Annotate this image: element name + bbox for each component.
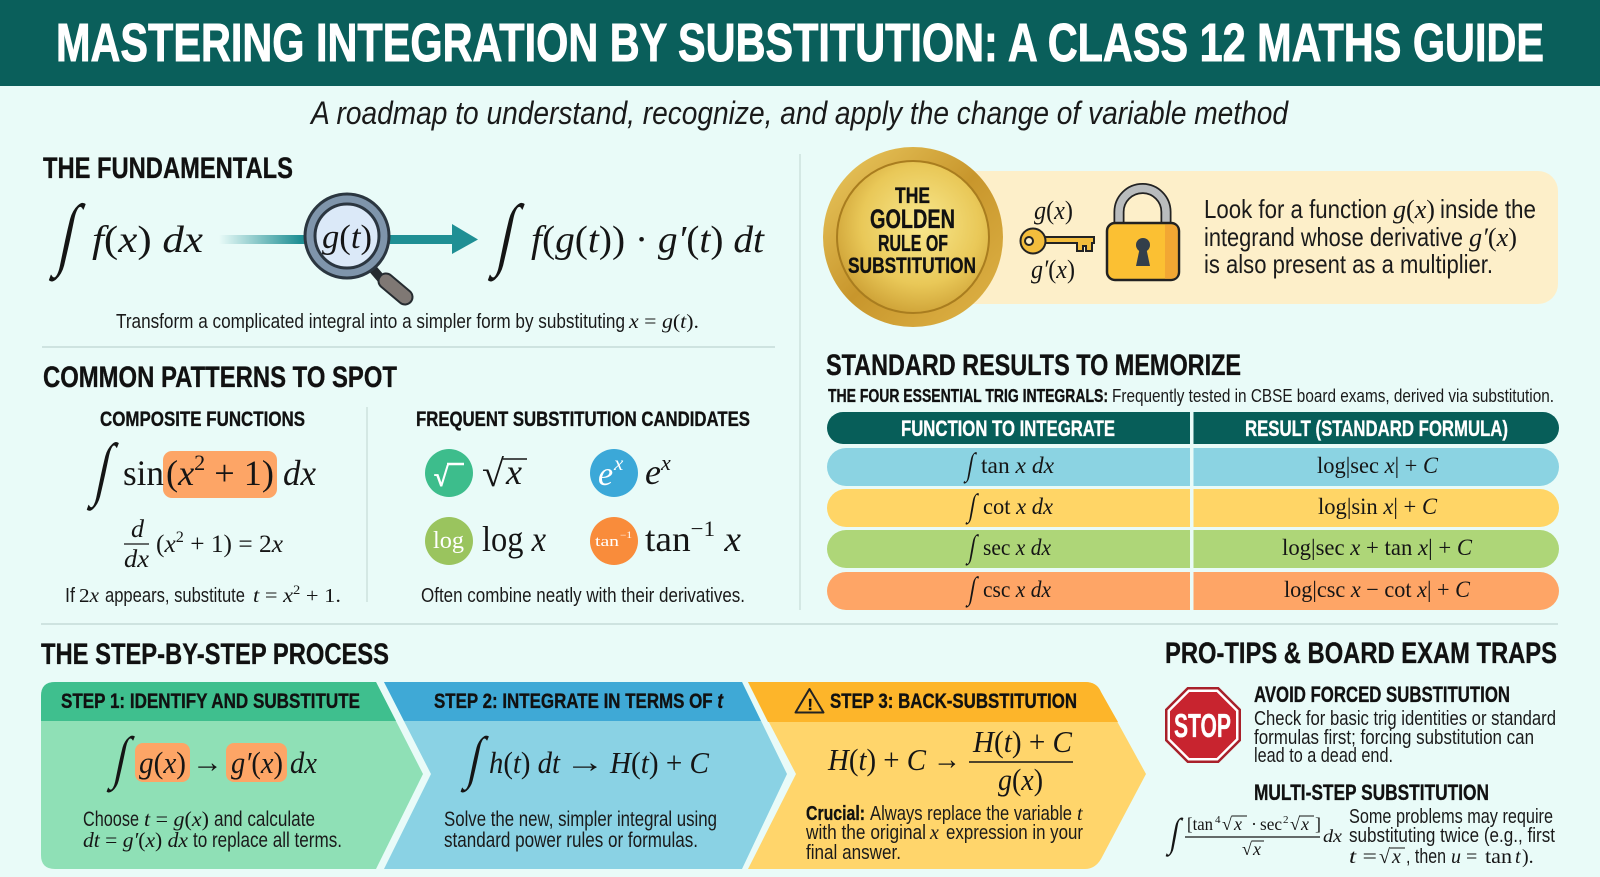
caption: transform description: Transform a complicated integral into a simpler form by substituting <box>116 311 625 333</box>
caption: transform description: x = g(t). <box>628 311 699 333</box>
step 1 chevron: t = g(x) <box>144 807 209 831</box>
step 2 chevron: h(t) dt <box>489 745 561 780</box>
step 1 chevron: STEP 1: IDENTIFY AND SUBSTITUTE <box>61 690 360 713</box>
tip: multi-step substitution: t = <box>1349 846 1377 868</box>
panel: the fundamentals <box>43 152 765 333</box>
tip: multi-step substitution: √ <box>1290 814 1300 834</box>
formula: derivative <box>124 516 283 573</box>
table row: sec: sec x dx <box>983 535 1052 560</box>
candidate: inverse tangent <box>590 516 741 565</box>
tip: multi-step substitution: √ <box>1379 846 1390 868</box>
step 1 chevron: dt = g′(x) dx <box>83 828 189 852</box>
table row: cot: cot x dx <box>983 494 1054 519</box>
icon: gold medal: RULE OF <box>878 230 948 256</box>
tip: multi-step substitution: √ <box>1242 839 1252 859</box>
tip: multi-step substitution: x <box>1233 814 1242 834</box>
tip: multi-step substitution: 2 <box>1283 814 1288 826</box>
text: golden rule description: inside the <box>1440 194 1536 224</box>
caption: composite hint: If <box>65 585 75 607</box>
step 1 chevron: and calculate <box>214 808 315 831</box>
tip: multi-step substitution: dx <box>1323 826 1342 846</box>
panel: standard results <box>826 349 1559 610</box>
icon: padlock <box>1107 188 1179 280</box>
table row: csc: csc x dx <box>983 577 1052 602</box>
formula: derivative: d <box>131 516 145 543</box>
formula: original integral: f(x) dx <box>92 219 203 261</box>
candidate: inverse tangent: −1 <box>620 530 632 540</box>
caption: composite hint: + 1. <box>300 585 341 607</box>
table row: csc: ∫ <box>965 570 981 608</box>
step 3 chevron <box>748 682 1146 869</box>
candidate: logarithm: log x <box>482 519 546 559</box>
formula: composite integral: 2 <box>194 450 205 475</box>
step 2 chevron <box>384 682 787 869</box>
icon: warning triangle <box>796 689 824 714</box>
icon: gold medal <box>823 147 1003 327</box>
step 1 chevron: g′(x) <box>231 745 283 780</box>
tip: avoid forced substitution: lead to a dead end. <box>1254 745 1393 767</box>
caption: composite hint <box>65 582 341 607</box>
table row: cot: log|sin x| + C <box>1318 494 1438 519</box>
icon: gold medal: SUBSTITUTION <box>848 253 976 278</box>
caption: composite hint: 2 <box>293 582 300 597</box>
candidate: square root: √ <box>482 453 504 495</box>
formula: composite integral: sin <box>123 453 164 493</box>
tip: multi-step substitution: sec <box>1260 814 1282 834</box>
text: golden rule description: g(x) <box>1393 195 1435 224</box>
step 3 chevron: with the original <box>805 822 926 844</box>
step 2 chevron: ∫ <box>460 726 492 793</box>
step 1 chevron <box>41 682 423 869</box>
tip: multi-step substitution <box>1165 780 1555 868</box>
step 3 chevron: Always replace the variable <box>870 803 1072 825</box>
step 3 chevron: x <box>929 822 939 844</box>
step 1 chevron: to replace all terms. <box>193 829 342 852</box>
candidate: exponential: x <box>660 450 671 475</box>
text: golden rule description <box>1204 194 1536 279</box>
panel: golden rule <box>823 147 1558 327</box>
candidate: inverse tangent: −1 <box>691 516 715 541</box>
step 3 chevron: Crucial: <box>806 803 865 825</box>
table row: tan: ∫ <box>963 446 979 484</box>
step 3 chevron: H(t) + C <box>827 742 926 777</box>
label: g prime of x: g′(x) <box>1031 255 1075 284</box>
icon: key <box>1020 228 1094 254</box>
step 3 chevron: g(x) <box>998 762 1043 797</box>
step 2 chevron: Solve the new, simpler integral using <box>444 808 717 831</box>
text: golden rule description: Look for a function <box>1204 194 1387 224</box>
table row: sec: log|sec x + tan x| + C <box>1282 535 1473 560</box>
tip: multi-step substitution: t <box>1515 846 1521 868</box>
caption: composite hint: 2x <box>79 585 99 607</box>
tip: multi-step substitution: [tan <box>1187 814 1213 834</box>
table header: RESULT (STANDARD FORMULA) <box>1245 416 1508 441</box>
formula: composite integral: + 1) <box>205 453 274 493</box>
candidate: inverse tangent: tan <box>645 519 689 559</box>
text: golden rule description: is also present as a multiplier. <box>1204 249 1493 279</box>
candidate: square root: x <box>505 452 522 492</box>
step 3 chevron: H(t) + C <box>972 724 1072 759</box>
formula: derivative: + 1) = 2 <box>184 531 272 558</box>
formula: derivative: 2 <box>176 529 184 546</box>
step 2 chevron: standard power rules or formulas. <box>444 829 698 852</box>
tip: multi-step substitution: tan <box>1485 846 1512 868</box>
formula: transformed integral: f(g(t)) · g′(t) dt <box>531 219 765 261</box>
candidate: exponential: e <box>598 456 613 493</box>
subheading: frequent candidates: FREQUENT SUBSTITUTION CANDIDATES <box>416 408 750 431</box>
step 1 chevron: g(x) <box>139 745 186 780</box>
tip: multi-step substitution: x <box>1300 814 1309 834</box>
panel: pro-tips <box>1165 637 1557 868</box>
icon: gold medal: THE <box>895 183 930 208</box>
formula: transformed integral <box>487 190 765 282</box>
callout background <box>930 171 1558 304</box>
step 2 chevron: → <box>565 746 605 779</box>
tip: multi-step substitution: substituting twice (e.g., first <box>1349 825 1555 847</box>
step 1 chevron: → <box>192 746 223 779</box>
candidate: inverse tangent: tan <box>595 534 620 550</box>
tip: multi-step substitution: u <box>1451 846 1461 868</box>
table row: tan: log|sec x| + C <box>1317 453 1439 478</box>
candidate: square root: √ <box>434 463 449 492</box>
tip: multi-step substitution: x <box>1252 839 1261 859</box>
candidate: logarithm: log <box>433 528 464 554</box>
arrow: transformation <box>219 224 478 254</box>
formula: composite integral <box>86 431 316 511</box>
label: g(x): g(x) <box>1034 196 1073 225</box>
heading: step-by-step: THE STEP-BY-STEP PROCESS <box>41 638 389 671</box>
tip: multi-step substitution: √ <box>1222 814 1232 834</box>
heading: the fundamentals: THE FUNDAMENTALS <box>43 152 293 185</box>
candidate: exponential: e <box>645 452 661 492</box>
step 2 chevron: STEP 2: INTEGRATE IN TERMS OF t <box>434 690 724 713</box>
table header <box>827 412 1559 444</box>
table row: tan <box>827 446 1559 486</box>
step 3 chevron: final answer. <box>806 842 901 864</box>
text: table intro <box>828 386 1554 406</box>
formula: composite integral: ∫ <box>86 431 121 511</box>
highlight: inner function <box>163 451 277 498</box>
formula: original integral <box>48 190 203 282</box>
tip: avoid forced substitution: formulas first; forcing substitution can <box>1254 727 1534 749</box>
formula: derivative: dx <box>124 546 149 573</box>
candidate: square root <box>425 449 527 497</box>
tip: multi-step substitution: , then <box>1406 846 1446 868</box>
icon: stop sign <box>1165 687 1241 763</box>
tip: multi-step substitution: = <box>1466 846 1477 868</box>
formula: derivative: x <box>272 531 283 558</box>
section dividers <box>41 154 1558 624</box>
tip: avoid forced substitution <box>1254 682 1556 767</box>
subheading: composite functions: COMPOSITE FUNCTIONS <box>100 408 305 431</box>
text: golden rule description: integrand whose derivative <box>1204 222 1463 252</box>
title banner <box>0 0 1600 86</box>
icon: warning triangle: ! <box>808 697 813 714</box>
step 2 chevron: H(t) + C <box>609 745 709 780</box>
tip: multi-step substitution: ). <box>1522 846 1534 868</box>
formula: derivative: (x <box>156 531 176 558</box>
tip: multi-step substitution: ∫ <box>1165 810 1185 857</box>
table row: tan: tan x dx <box>981 453 1055 478</box>
formula: transformed integral: ∫ <box>487 190 528 282</box>
candidate: exponential <box>590 449 671 497</box>
subtitle: A roadmap to understand, recognize, and apply the change of variable method <box>309 95 1289 131</box>
icon: magnifying glass: g(t) <box>322 219 372 256</box>
table row: cot <box>827 487 1559 527</box>
caption: composite hint: appears, substitute <box>105 585 245 607</box>
step 1 chevron: ∫ <box>106 726 138 793</box>
table row: sec: ∫ <box>965 528 981 566</box>
table row: csc: log|csc x − cot x| + C <box>1284 577 1471 602</box>
heading: common patterns: COMMON PATTERNS TO SPOT <box>43 361 397 394</box>
formula: composite integral: (x <box>166 453 194 493</box>
text: table intro: THE FOUR ESSENTIAL TRIG INTEGRALS: <box>828 386 1108 406</box>
caption: composite hint: t = x <box>253 585 291 607</box>
icon: stop sign: STOP <box>1174 707 1231 744</box>
candidate: inverse tangent: x <box>715 519 741 559</box>
caption: candidates note: Often combine neatly with their derivatives. <box>421 585 745 607</box>
table row: cot: ∫ <box>965 487 981 525</box>
tip: multi-step substitution: ] <box>1315 814 1321 834</box>
tip: multi-step substitution: MULTI-STEP SUBSTITUTION <box>1254 780 1489 805</box>
candidate: logarithm <box>425 517 546 565</box>
step 3 chevron: expression in your <box>946 822 1083 844</box>
formula: original integral: ∫ <box>48 190 89 282</box>
tip: avoid forced substitution: AVOID FORCED SUBSTITUTION <box>1254 682 1510 707</box>
panel: common patterns <box>43 361 750 607</box>
tip: multi-step substitution: 4 <box>1215 814 1221 826</box>
text: golden rule description: g′(x) <box>1469 223 1517 252</box>
table header: FUNCTION TO INTEGRATE <box>901 416 1115 441</box>
tip: multi-step substitution: x <box>1391 846 1401 868</box>
formula: composite integral: dx <box>283 453 316 493</box>
step 1 chevron: dx <box>290 745 317 780</box>
table row: sec <box>827 528 1559 568</box>
tip: multi-step substitution: · <box>1251 814 1257 834</box>
icon: gold medal: GOLDEN <box>870 204 955 234</box>
candidate: exponential: x <box>613 451 624 475</box>
step 3 chevron: → <box>933 743 961 776</box>
panel: step-by-step process <box>41 638 1146 869</box>
step 3 chevron: STEP 3: BACK-SUBSTITUTION <box>830 690 1077 713</box>
step 1 chevron: Choose <box>83 808 139 831</box>
table row: csc <box>827 570 1559 610</box>
heading: standard results: STANDARD RESULTS TO MEMORIZE <box>826 349 1241 382</box>
step 3 chevron: t <box>1077 803 1083 825</box>
tip: multi-step substitution: Some problems may require <box>1349 806 1553 828</box>
icon: magnifying glass <box>305 194 405 297</box>
